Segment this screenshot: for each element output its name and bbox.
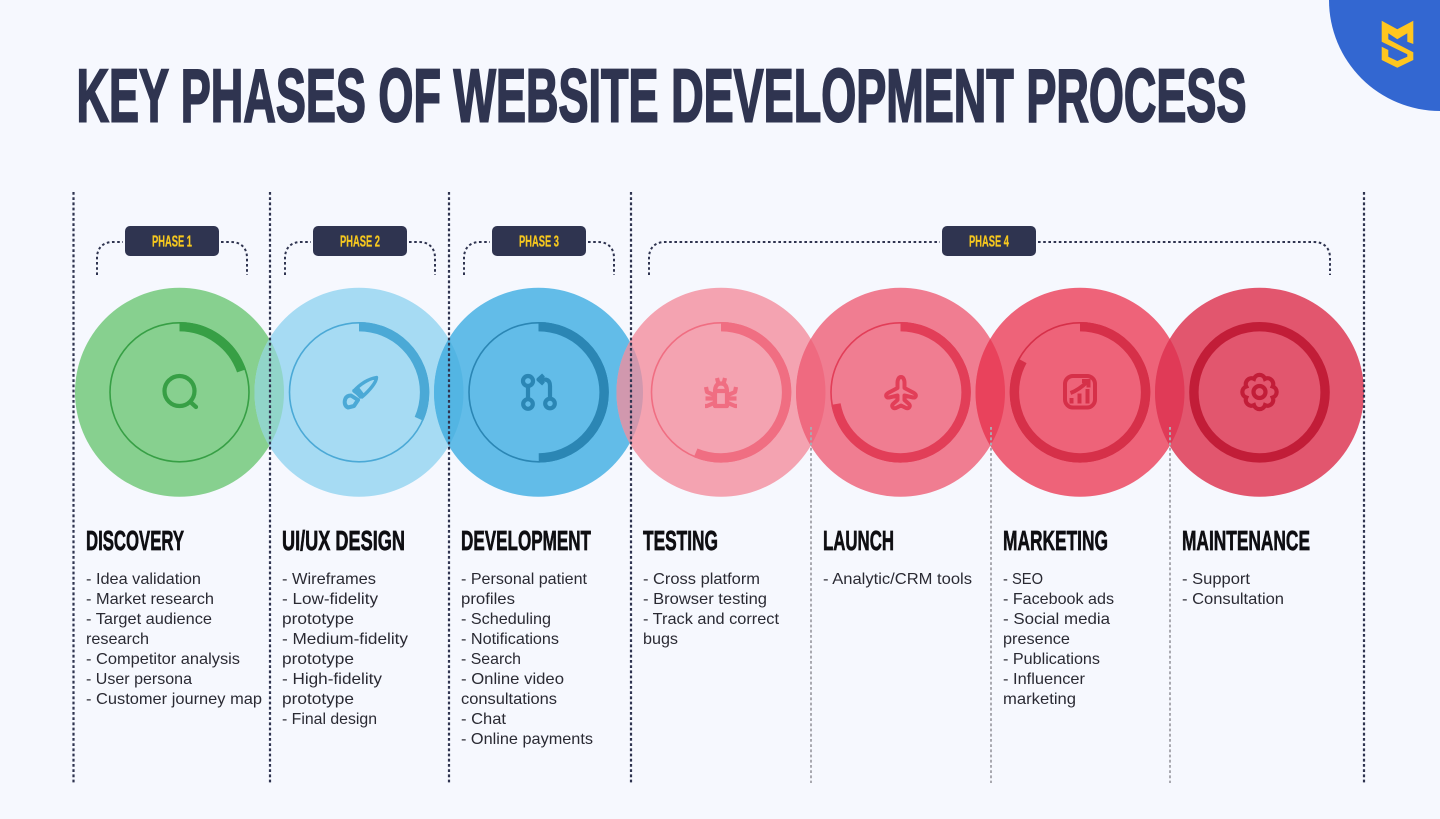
heading: maintenance: MAINTENANCE — [1182, 525, 1310, 556]
list: testing: bugs — [643, 631, 678, 648]
list: discovery: research — [86, 631, 149, 648]
circle: maintenance — [1155, 288, 1364, 497]
list: discovery: - Target audience — [86, 611, 212, 628]
list: testing: - Cross platform — [643, 571, 760, 588]
list: marketing: presence — [1003, 631, 1070, 648]
bracket: phase 3 — [464, 226, 614, 275]
logo badge — [1329, 0, 1440, 111]
list: marketing: - Influencer — [1003, 671, 1086, 688]
list: testing: - Track and correct — [643, 611, 780, 628]
list: marketing: - Facebook ads — [1003, 591, 1114, 608]
list: ui/ux design: prototype — [282, 611, 354, 628]
circle: discovery — [75, 288, 284, 497]
progress ring: maintenance — [1194, 327, 1325, 458]
list: ui/ux design: - High-fidelity — [282, 671, 382, 688]
icon: paintbrush — [345, 378, 376, 408]
list: development: - Notifications — [461, 631, 559, 648]
list: ui/ux design: - Final design — [282, 711, 377, 728]
icon: growth chart — [1065, 376, 1095, 408]
label: phase 4: PHASE 4 — [969, 234, 1009, 250]
progress ring: testing — [652, 323, 790, 462]
list: maintenance: - Support — [1182, 571, 1251, 588]
icon: bug — [705, 378, 737, 406]
list: marketing — [1003, 571, 1114, 708]
list: launch: - Analytic/CRM tools — [823, 571, 972, 588]
heading: ui/ux design: UI/UX DESIGN — [282, 525, 405, 556]
list: development: - Search — [461, 651, 521, 668]
icon: magnifier — [164, 376, 196, 407]
list: development: consultations — [461, 691, 557, 708]
list: development: - Online video — [461, 671, 564, 688]
bracket: phase 2 — [285, 226, 435, 275]
label: phase 3: PHASE 3 — [519, 234, 559, 250]
list: testing: - Browser testing — [643, 591, 767, 608]
icon: git branch — [523, 375, 555, 409]
stage column dividers — [811, 427, 1170, 783]
list: ui/ux design — [282, 571, 408, 728]
list: ui/ux design: - Medium-fidelity — [282, 631, 408, 648]
list: development: - Scheduling — [461, 611, 551, 628]
list: discovery: - User persona — [86, 671, 192, 688]
list: development: - Personal patient — [461, 571, 588, 588]
progress ring: ui/ux design — [290, 323, 428, 462]
list: development: - Chat — [461, 711, 507, 728]
circle: testing — [616, 288, 826, 497]
heading: marketing: MARKETING — [1003, 525, 1108, 556]
progress ring: discovery — [110, 323, 249, 462]
progress ring: marketing — [1010, 323, 1150, 462]
list: development: - Online payments — [461, 731, 593, 748]
list: ui/ux design: - Wireframes — [282, 571, 376, 588]
list: marketing: - Publications — [1003, 651, 1100, 668]
list: development — [461, 571, 593, 748]
list: discovery: - Competitor analysis — [86, 651, 240, 668]
list: development: profiles — [461, 591, 515, 608]
icon: airplane — [886, 377, 916, 408]
progress ring: launch — [831, 323, 970, 462]
progress ring: development — [469, 323, 608, 462]
label: phase 1: PHASE 1 — [152, 234, 192, 250]
list: testing — [643, 571, 780, 648]
heading: testing: TESTING — [643, 525, 718, 556]
list: discovery: - Customer journey map — [86, 691, 262, 708]
icon: gear — [1242, 375, 1277, 409]
circle: development — [434, 288, 643, 497]
label: phase 2 — [313, 226, 407, 256]
list: discovery: - Market research — [86, 591, 214, 608]
list: marketing: - Social media — [1003, 611, 1110, 628]
list: ui/ux design: prototype — [282, 691, 354, 708]
heading: discovery: DISCOVERY — [86, 525, 184, 556]
label: phase 3 — [492, 226, 586, 256]
list: maintenance — [1182, 571, 1284, 608]
list: marketing: marketing — [1003, 691, 1076, 708]
circle: launch — [796, 288, 1005, 497]
bracket: phase 1 — [97, 226, 247, 275]
list: discovery: - Idea validation — [86, 571, 201, 588]
label: phase 2: PHASE 2 — [340, 234, 380, 250]
list: ui/ux design: prototype — [282, 651, 354, 668]
list: ui/ux design: - Low-fidelity — [282, 591, 378, 608]
bracket: phase 4 — [649, 226, 1330, 275]
list: discovery — [86, 571, 262, 708]
circle: marketing — [976, 288, 1184, 497]
list: marketing: - SEO — [1003, 571, 1043, 588]
circle: ui/ux design — [254, 288, 464, 497]
heading: development: DEVELOPMENT — [461, 525, 591, 556]
label: phase 4 — [942, 226, 1036, 256]
phase column dividers — [74, 192, 1364, 783]
heading: launch: LAUNCH — [823, 525, 894, 556]
label: phase 1 — [125, 226, 219, 256]
list: maintenance: - Consultation — [1182, 591, 1284, 608]
